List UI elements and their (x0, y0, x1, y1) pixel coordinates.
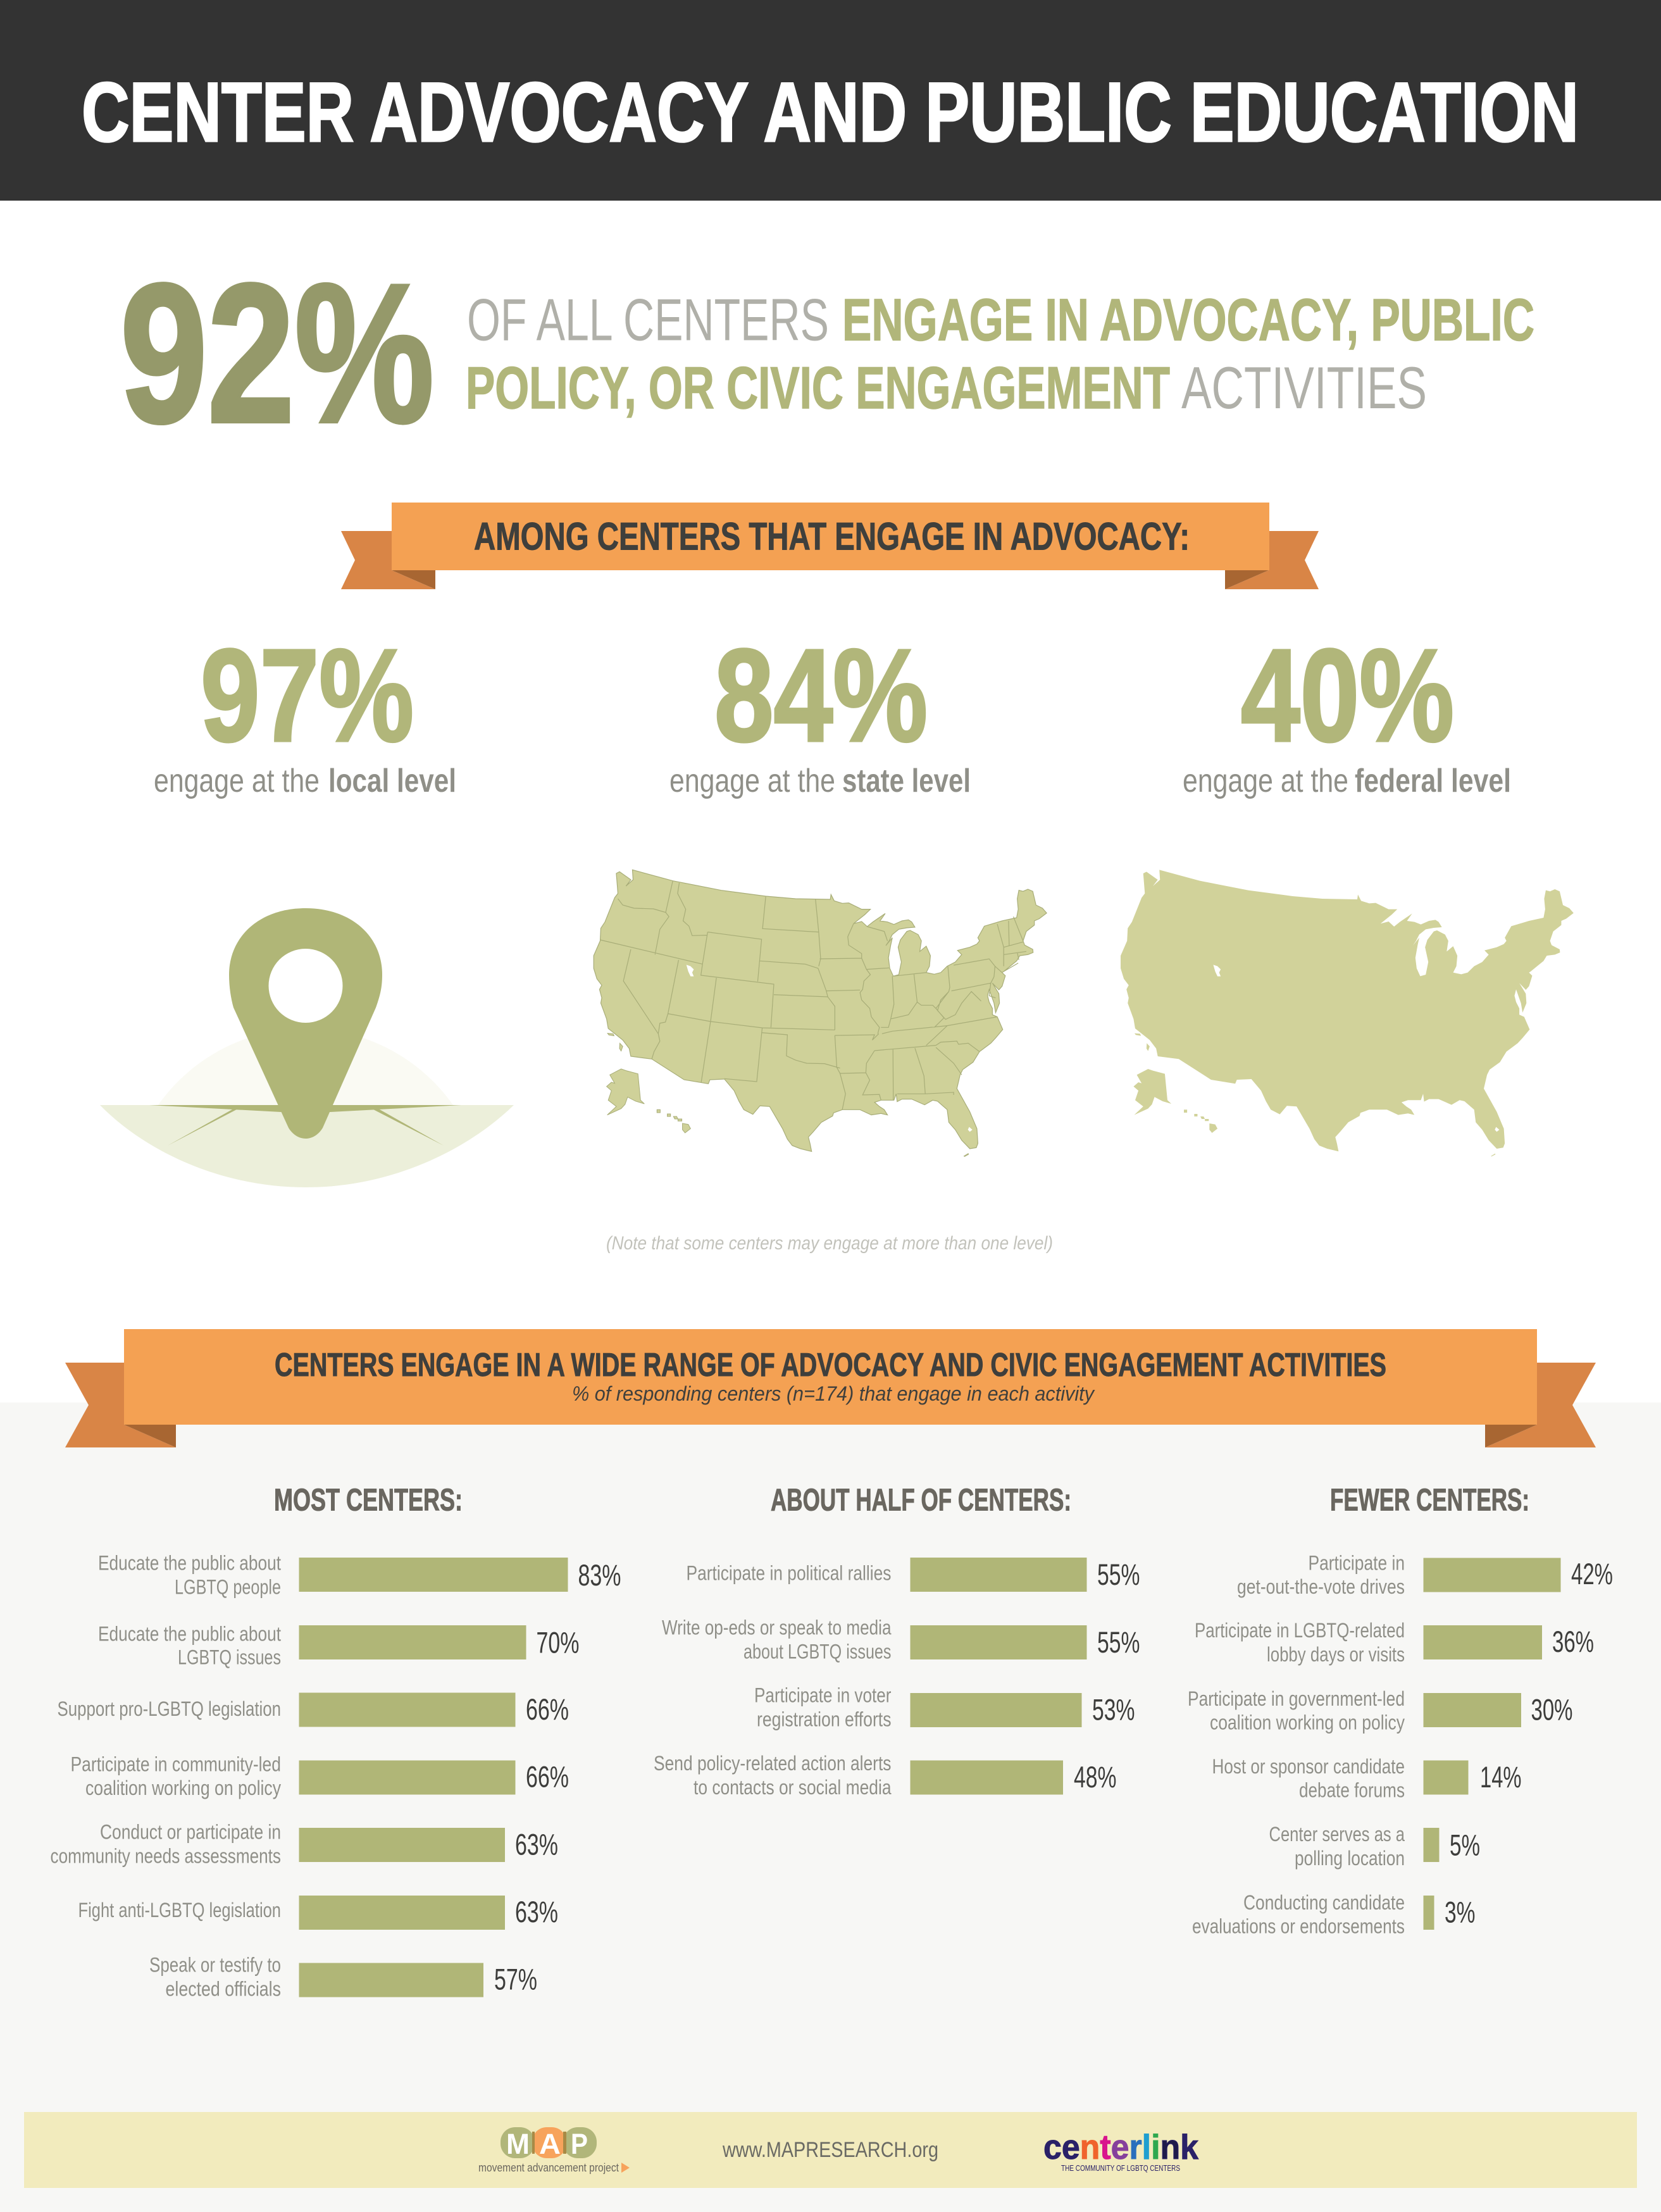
bar: educate the public about LGBTQ people 83% (98, 1552, 621, 1599)
bar: support pro-LGBTQ legislation 66%: Support pro-LGBTQ legislation (57, 1697, 281, 1720)
map: United States silhouette (1121, 870, 1574, 1156)
bar: educate the public about LGBTQ issues 70% (98, 1623, 580, 1668)
headline statement (466, 286, 1534, 421)
heading: fewer centers: FEWER CENTERS: (1330, 1484, 1529, 1518)
stat: state level (669, 623, 971, 799)
bar: participate in community-led coalition 66%: coalition working on policy (85, 1777, 281, 1799)
bar: speak or testify to elected officials 57% (149, 1953, 537, 2000)
logo: movement advancement project: M (506, 2128, 530, 2160)
website address: www.MAPRESEARCH.org (722, 2138, 938, 2162)
bar chart: most centers (51, 1484, 621, 2000)
bar: educate the public about LGBTQ people 83%: LGBTQ people (175, 1576, 281, 1599)
logo: movement advancement project: P (571, 2128, 588, 2160)
bar: polling location 5%: 5% (1450, 1828, 1480, 1862)
bar: government-led coalition 30% (1188, 1687, 1573, 1734)
ribbon: wide range of activities (65, 1329, 1596, 1447)
bar: action alerts 48%: Send policy-related action alerts (654, 1752, 891, 1775)
bar chart: about half of centers (654, 1484, 1140, 1799)
bar: educate the public about LGBTQ issues 70%: LGBTQ issues (178, 1646, 281, 1668)
logo: centerlink: THE COMMUNITY OF LGBTQ CENTERS (1061, 2163, 1180, 2173)
bar: action alerts 48%: 48% (1074, 1760, 1116, 1794)
bar: fight anti-LGBTQ legislation 63%: Fight anti-LGBTQ legislation (78, 1899, 281, 1921)
footer band (24, 2112, 1637, 2188)
bar: polling location 5%: Center serves as a (1269, 1823, 1405, 1846)
bar: educate the public about LGBTQ people 83%: 83% (578, 1558, 621, 1592)
map: United States with state borders (594, 870, 1047, 1156)
bar: fight anti-LGBTQ legislation 63% (78, 1895, 558, 1930)
bar: action alerts 48%: to contacts or social media (694, 1776, 892, 1799)
bar: support pro-LGBTQ legislation 66%: 66% (526, 1692, 569, 1726)
bar: lobby days 36%: lobby days or visits (1267, 1643, 1405, 1666)
bar: community needs assessments 63%: Conduct or participate in (100, 1820, 281, 1843)
bar: candidate evaluations 3% (1192, 1891, 1476, 1938)
logo: movement advancement project (478, 2127, 630, 2174)
bar: lobby days 36% (1195, 1619, 1594, 1666)
heading: about half of centers: ABOUT HALF OF CENTERS: (771, 1484, 1071, 1518)
stat: local level: engage at the (154, 763, 320, 799)
headline statement: ACTIVITIES (1181, 354, 1427, 421)
stat: local level: local level (328, 763, 456, 799)
bar: get-out-the-vote 42%: get-out-the-vote drives (1237, 1575, 1405, 1598)
stat: local level (154, 623, 456, 799)
bar: candidate debate forums 14%: Host or sponsor candidate (1212, 1755, 1405, 1778)
bar: participate in political rallies 55% (686, 1558, 1140, 1592)
bar: polling location 5% (1269, 1823, 1480, 1870)
bar: get-out-the-vote 42%: Participate in (1309, 1552, 1405, 1575)
bar: speak or testify to elected officials 57%: Speak or testify to (149, 1953, 281, 1976)
bar: voter registration 53%: Participate in voter (754, 1684, 892, 1706)
bar: candidate evaluations 3%: 3% (1445, 1895, 1476, 1929)
bar: speak or testify to elected officials 57%: 57% (494, 1962, 537, 1996)
bar: lobby days 36%: Participate in LGBTQ-related (1195, 1619, 1405, 1642)
logo: movement advancement project: movement advancement project (478, 2161, 619, 2174)
bar: voter registration 53% (754, 1684, 1135, 1730)
bar: fight anti-LGBTQ legislation 63%: 63% (515, 1895, 558, 1928)
bar: educate the public about LGBTQ people 83%: Educate the public about (98, 1552, 281, 1575)
ribbon: among centers that engage in advocacy (341, 503, 1319, 589)
bar: government-led coalition 30%: coalition working on policy (1210, 1711, 1405, 1734)
header band with title (0, 0, 1661, 201)
headline statistic: 92% of all centers (120, 244, 1534, 464)
stat: state level: engage at the (669, 763, 835, 799)
bar: government-led coalition 30%: 30% (1531, 1692, 1573, 1727)
bar: candidate evaluations 3%: evaluations or endorsements (1192, 1915, 1405, 1938)
bar: community needs assessments 63% (51, 1820, 558, 1867)
bar: voter registration 53%: registration efforts (757, 1708, 891, 1730)
bar: candidate debate forums 14% (1212, 1755, 1521, 1801)
stat: state level: 84% (714, 623, 928, 770)
bar: support pro-LGBTQ legislation 66% (57, 1692, 569, 1727)
bar: write op-eds 55%: about LGBTQ issues (743, 1640, 891, 1663)
bar: participate in political rallies 55%: Participate in political rallies (686, 1562, 891, 1585)
bar: participate in political rallies 55%: 55% (1097, 1558, 1140, 1591)
ribbon: among centers that engage in advocacy: AMONG CENTERS THAT ENGAGE IN ADVOCACY: (474, 515, 1190, 558)
bar: get-out-the-vote 42%: 42% (1571, 1557, 1613, 1590)
bar: participate in community-led coalition 66%: 66% (526, 1759, 569, 1794)
note text: (Note that some centers may engage at more than one level) (606, 1233, 1053, 1254)
bar: community needs assessments 63%: 63% (515, 1828, 558, 1861)
icon: location pin on ground (100, 908, 514, 1187)
heading: most centers: MOST CENTERS: (274, 1484, 463, 1518)
bar chart: fewer centers (1188, 1484, 1613, 1938)
big number 92%: 92% (120, 244, 434, 464)
headline statement: POLICY, OR CIVIC ENGAGEMENT (466, 354, 1170, 421)
bar: write op-eds 55% (662, 1616, 1140, 1663)
headline statement: OF ALL CENTERS (467, 286, 829, 353)
bar: educate the public about LGBTQ issues 70%: 70% (537, 1625, 580, 1659)
bar: polling location 5%: polling location (1295, 1847, 1405, 1870)
bar: voter registration 53%: 53% (1092, 1692, 1135, 1727)
stat: federal level (1183, 623, 1511, 799)
bar: candidate debate forums 14%: debate forums (1299, 1778, 1405, 1801)
bar: write op-eds 55%: 55% (1097, 1625, 1140, 1659)
ribbon subheading: % of responding centers (n=174) that engage in each activity (572, 1382, 1095, 1405)
bar: speak or testify to elected officials 57%: elected officials (166, 1977, 281, 2000)
stat: federal level: 40% (1241, 623, 1454, 770)
bar: government-led coalition 30%: Participate in government-led (1188, 1687, 1405, 1710)
stat: local level: 97% (201, 623, 414, 770)
logo: movement advancement project: A (539, 2128, 561, 2160)
bar: community needs assessments 63%: community needs assessments (51, 1844, 281, 1867)
stat: federal level: federal level (1355, 763, 1511, 799)
bar: participate in community-led coalition 66%: Participate in community-led (71, 1753, 281, 1776)
bar: get-out-the-vote 42% (1237, 1552, 1613, 1598)
bar: action alerts 48% (654, 1752, 1116, 1799)
stat: federal level: engage at the (1183, 763, 1348, 799)
bar: candidate debate forums 14%: 14% (1480, 1760, 1521, 1794)
bar: participate in community-led coalition 66% (71, 1753, 569, 1799)
logo: centerlink: centerlink (1043, 2127, 1198, 2166)
bar: educate the public about LGBTQ issues 70%: Educate the public about (98, 1623, 281, 1646)
bar: write op-eds 55%: Write op-eds or speak to media (662, 1616, 892, 1639)
bar: lobby days 36%: 36% (1552, 1625, 1594, 1658)
stat: state level: state level (842, 763, 971, 799)
bar: candidate evaluations 3%: Conducting candidate (1243, 1891, 1405, 1914)
